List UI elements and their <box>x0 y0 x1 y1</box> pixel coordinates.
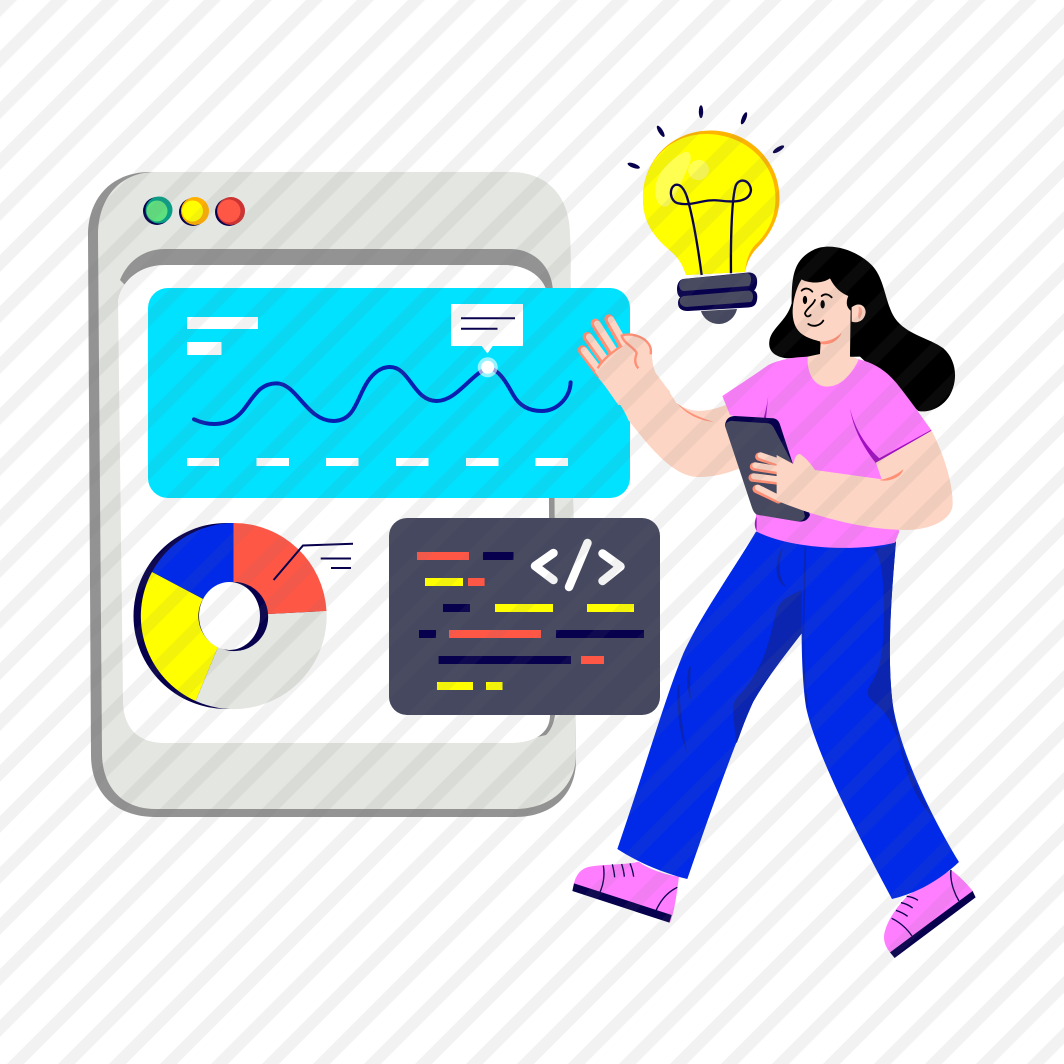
window shadow frame <box>88 172 576 817</box>
hand fingers <box>582 319 625 373</box>
panel: code editor <box>389 518 660 715</box>
trousers <box>617 532 959 899</box>
bulb rays <box>627 105 785 170</box>
window body <box>98 172 576 809</box>
panel: line chart <box>148 288 630 498</box>
holding hand fingers <box>753 455 782 499</box>
line series <box>194 367 571 424</box>
hand creases <box>598 334 651 368</box>
left shoe <box>572 862 679 923</box>
screen inner shadow <box>120 249 556 743</box>
icon: light bulb <box>627 105 785 324</box>
bulb base <box>677 272 757 324</box>
bulb filament <box>671 181 751 275</box>
window button: green <box>143 196 172 225</box>
chart axis ticks <box>187 458 568 466</box>
segment: blue <box>152 523 234 599</box>
chart heading placeholder bars <box>187 317 258 355</box>
neck and face <box>793 278 858 387</box>
browser window <box>88 172 576 817</box>
donut hole shadow <box>200 582 268 650</box>
screen <box>118 265 550 743</box>
raised arm <box>593 347 740 477</box>
segment: yellow <box>141 572 218 701</box>
brows nose and smile <box>802 289 832 326</box>
code lines: yellow <box>425 578 634 690</box>
character: woman <box>572 247 976 958</box>
window button: red <box>215 197 245 226</box>
donut chart <box>134 523 353 709</box>
window button: yellow <box>179 197 209 226</box>
bulb rim <box>643 130 780 275</box>
shirt folds <box>755 395 932 531</box>
data point marker <box>478 357 498 377</box>
callout <box>451 304 523 354</box>
segment: grey <box>196 611 327 709</box>
code lines: red <box>417 552 604 664</box>
ear <box>852 304 866 322</box>
bulb glass <box>643 134 776 275</box>
arm crease <box>677 403 714 422</box>
icon: code brackets <box>535 543 620 587</box>
neck shadow <box>820 333 842 344</box>
trouser shading <box>677 542 933 818</box>
segment: red <box>234 523 326 614</box>
forearm crease <box>879 469 903 481</box>
eyes <box>803 296 825 308</box>
hair <box>769 247 955 411</box>
donut hole <box>199 582 260 650</box>
right shoe <box>884 870 976 958</box>
leader line <box>274 544 353 580</box>
tablet <box>725 416 810 522</box>
donut shadow <box>134 523 320 709</box>
code lines: navy <box>419 552 644 664</box>
hand palm <box>595 334 670 405</box>
bulb highlights <box>655 152 712 207</box>
raised hand <box>582 319 670 405</box>
holding arm <box>777 431 953 530</box>
shirt <box>722 357 932 548</box>
